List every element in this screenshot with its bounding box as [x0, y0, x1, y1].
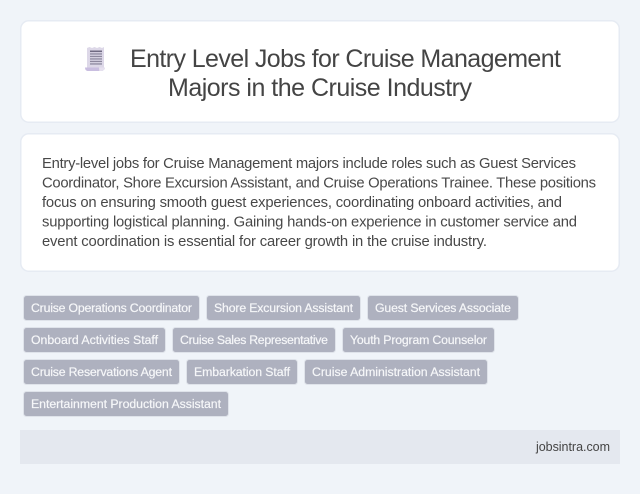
title [130, 45, 561, 102]
text block: description: Coordinator, Shore Excursion Assistant, and Cruise Operations Trainee. These positions [42, 176, 596, 192]
tag [186, 360, 298, 384]
footer source text: jobsintra.com [535, 440, 610, 454]
tag [368, 296, 518, 320]
tag: Shore Excursion Assistant [214, 301, 354, 315]
panel: description [21, 134, 619, 271]
tag: Cruise Operations Coordinator [31, 301, 192, 315]
tag [172, 328, 336, 352]
tag [206, 296, 360, 320]
tag [304, 360, 488, 384]
text block: description [42, 156, 596, 250]
text block: description: focus on ensuring smooth guest experiences, coordinating onboard activities, and [42, 195, 562, 211]
text block: description: supporting logistical planning. Gaining hands-on experience in customer service and [42, 214, 577, 230]
title: Majors in the Cruise Industry [168, 74, 472, 102]
tag: Entertainment Production Assistant [31, 397, 222, 411]
footer bar [20, 430, 620, 464]
tag: Youth Program Counselor [350, 333, 487, 347]
tag: Onboard Activities Staff [31, 333, 159, 347]
tag: Embarkation Staff [194, 365, 291, 379]
tag [24, 392, 228, 416]
panel: title header [21, 21, 619, 122]
tag [342, 328, 494, 352]
icon: paper scroll [85, 47, 105, 71]
tag [24, 360, 180, 384]
text block: description: Entry-level jobs for Cruise Management majors include roles such as Guest Services [42, 156, 576, 172]
tag: Cruise Reservations Agent [31, 365, 173, 379]
tag [24, 328, 166, 352]
tag [24, 296, 200, 320]
title: Entry Level Jobs for Cruise Management [130, 45, 561, 73]
tag: Cruise Administration Assistant [312, 365, 481, 379]
tag: Cruise Sales Representative [180, 333, 328, 347]
text block: description: event coordination is essential for career growth in the cruise industry. [42, 234, 487, 250]
tags: job titles [24, 296, 518, 416]
tag: Guest Services Associate [375, 301, 511, 315]
